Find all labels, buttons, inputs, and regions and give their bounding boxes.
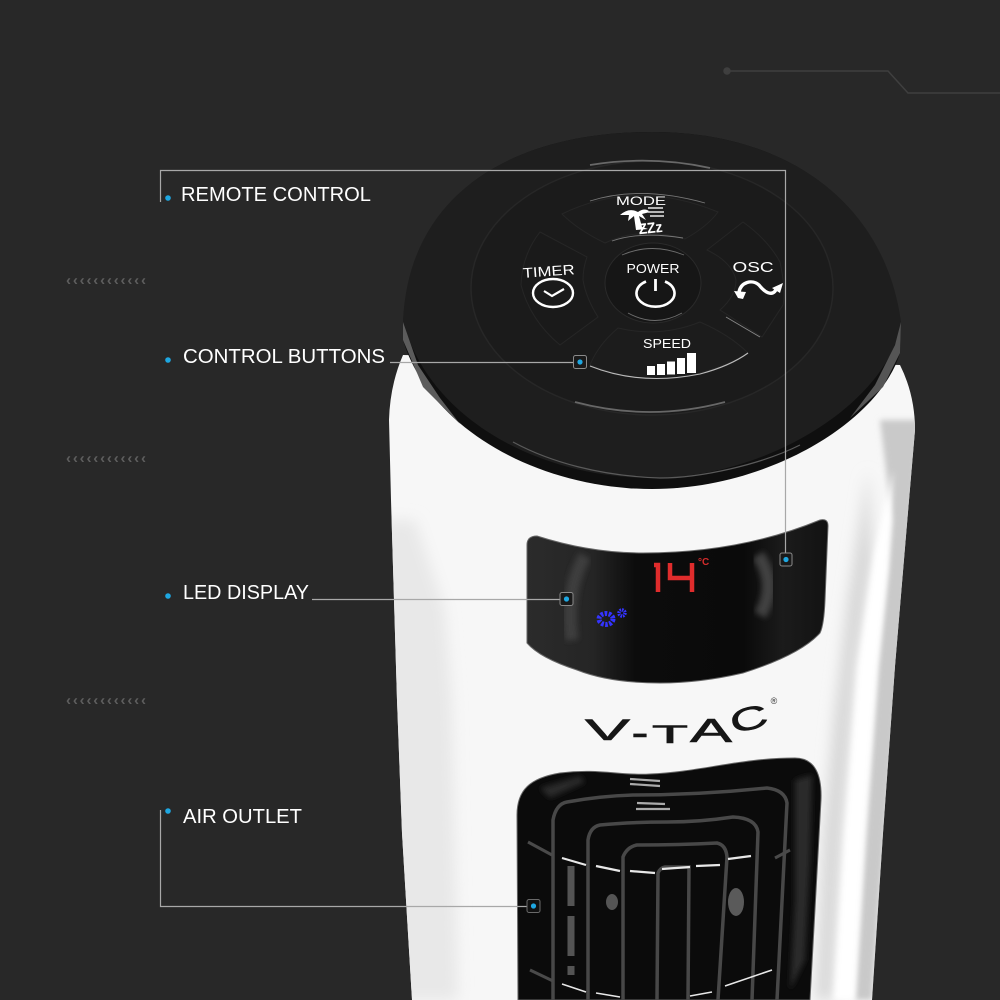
brand logo: -	[632, 718, 648, 748]
control panel ring	[471, 161, 833, 415]
brand logo: T	[652, 721, 688, 749]
lid right rim highlight	[850, 322, 901, 418]
lid	[403, 132, 901, 489]
button: power: POWER	[626, 262, 680, 276]
LED display	[527, 520, 828, 683]
callout: control buttons	[165, 346, 586, 368]
callout: air outlet: AIR OUTLET	[183, 806, 302, 828]
brand logo: A	[690, 712, 732, 749]
chevron row 3: ‹‹‹‹‹‹‹‹‹‹‹‹	[66, 692, 146, 709]
button: power	[605, 243, 701, 323]
button: mode: ZZz	[638, 219, 663, 238]
grille side panels	[540, 775, 812, 990]
grille side bars	[528, 842, 790, 981]
chevron row 1: ‹‹‹‹‹‹‹‹‹‹‹‹	[66, 272, 146, 289]
callout: control buttons: CONTROL BUTTONS	[183, 346, 385, 368]
grille vertical wires	[553, 788, 787, 1000]
callout: LED display	[165, 582, 573, 606]
lid top surface	[403, 132, 901, 478]
button: speed	[590, 322, 748, 379]
brand logo	[585, 696, 778, 749]
brand logo: C	[726, 697, 772, 741]
callout: remote control: REMOTE CONTROL	[181, 184, 371, 206]
fan body	[389, 355, 915, 1000]
callout: LED display: LED DISPLAY	[183, 582, 309, 604]
callout: remote control	[160, 170, 792, 566]
blue fan icons	[599, 610, 625, 624]
brand logo: V	[585, 714, 630, 747]
ring highlights	[575, 161, 725, 412]
button: timer	[521, 232, 598, 345]
decorative top-right connector	[724, 68, 1000, 93]
grille bright highlights	[562, 779, 772, 997]
button: speed: SPEED	[643, 337, 691, 351]
body shading	[380, 420, 920, 1000]
button: mode: MODE	[616, 196, 666, 208]
degree symbol: °C	[698, 557, 709, 568]
display reflections	[570, 555, 769, 640]
air outlet grille	[517, 758, 821, 1000]
button: mode	[562, 193, 718, 243]
temperature readout	[654, 563, 692, 592]
button: osc	[707, 222, 784, 337]
chevron row 2: ‹‹‹‹‹‹‹‹‹‹‹‹	[66, 450, 146, 467]
brand logo: ®	[771, 696, 778, 706]
lid edge highlight	[513, 442, 800, 478]
product: tower fan	[380, 132, 920, 1000]
button: osc: OSC	[732, 260, 774, 276]
lid left rim highlight	[403, 322, 460, 424]
callout: air outlet	[160, 806, 540, 912]
button: timer: TIMER	[522, 261, 575, 281]
